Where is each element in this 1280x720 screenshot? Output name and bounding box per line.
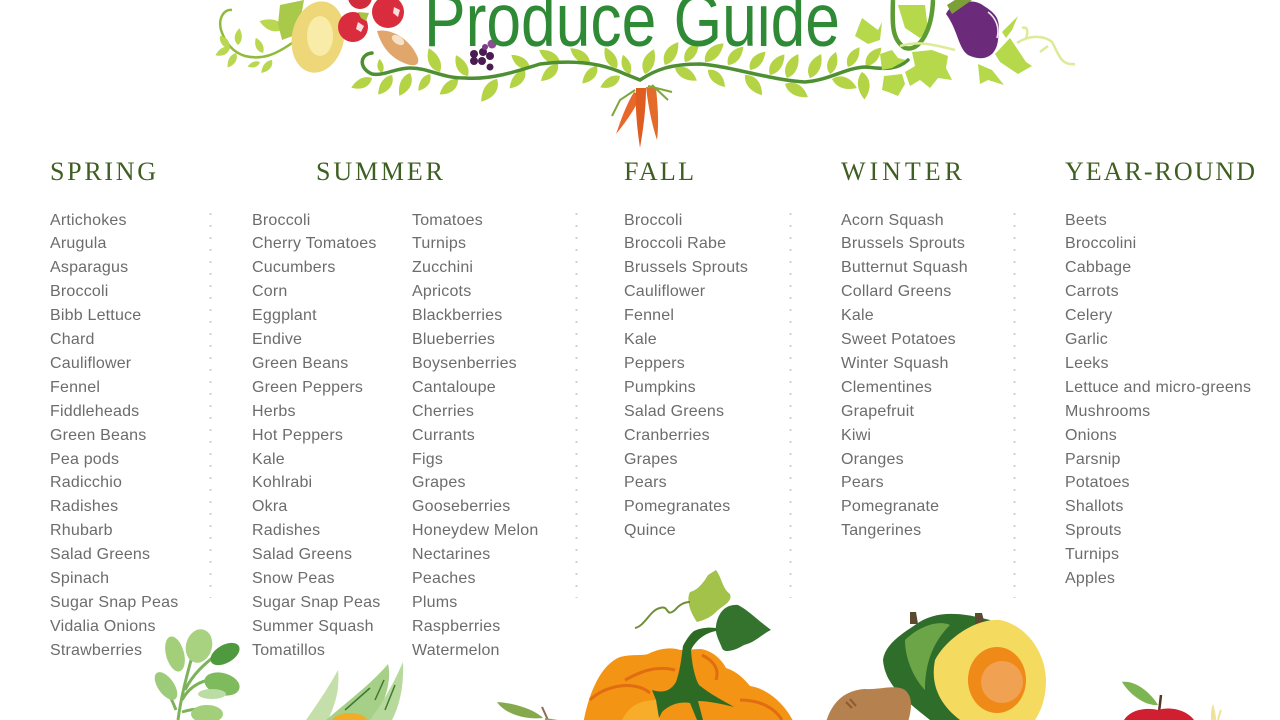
list: summer produce, second column: Raspberries [412,618,500,635]
illustration: header vine garland with produce [216,0,1076,148]
list: summer produce, second column: Currants [412,427,475,444]
list: fall produce: Grapes [624,451,678,468]
list: year-round produce: Potatoes [1065,474,1130,491]
lemon [285,0,351,78]
list: spring produce: Chard [50,331,95,348]
pumpkin [583,570,795,720]
list: summer produce, first column: Herbs [252,403,296,420]
strawberries [338,0,404,42]
list: summer produce, second column: Cantaloupe [412,379,496,396]
list: winter produce: Winter Squash [841,355,949,372]
right lime grape leaves [855,5,1032,96]
panel: winter [841,157,968,539]
list: winter produce: Sweet Potatoes [841,331,956,348]
list: winter produce: Butternut Squash [841,259,968,276]
apple [1122,682,1221,720]
list: year-round produce: Lettuce and micro-greens [1065,379,1251,396]
list: summer produce, first column: Broccoli [252,212,311,228]
list: summer produce, second column: Gooseberries [412,498,510,515]
U-shaped stems [893,0,933,48]
list: year-round produce: Apples [1065,570,1115,587]
list: summer produce, second column: Plums [412,594,457,611]
heading: summer: SUMMER [316,157,444,186]
list: summer produce, first column: Sugar Snap Peas [252,594,380,611]
panel: fall [624,157,748,539]
sweet potato [826,687,911,720]
list: summer produce, first column: Kohlrabi [252,474,312,491]
panel: spring [50,157,178,659]
list: year-round produce: Parsnip [1065,451,1121,468]
corn [306,662,403,720]
list: winter produce: Acorn Squash [841,212,944,228]
list: summer produce, second column: Blackberries [412,307,502,324]
list: summer produce, second column: Blueberries [412,331,495,348]
list: summer produce, first column: Okra [252,498,287,515]
list: summer produce, first column: Cherry Tomatoes [252,235,377,252]
list: fall produce: Pomegranates [624,498,730,515]
list: summer produce, second column: Cherries [412,403,474,420]
list: year-round produce: Turnips [1065,546,1119,563]
list: year-round produce: Leeks [1065,355,1109,372]
eggplant [946,0,999,58]
list: winter produce: Pears [841,474,884,491]
list: year-round produce: Beets [1065,212,1107,228]
list: summer produce, second column: Honeydew Melon [412,522,538,539]
list: fall produce: Quince [624,522,676,539]
heading: year-round: YEAR-ROUND [1065,157,1255,186]
list: winter produce [841,212,968,539]
tan fig [377,30,418,65]
list: year-round produce: Celery [1065,307,1112,324]
list: summer produce, second column: Figs [412,451,443,468]
list: summer produce, first column: Summer Squash [252,618,374,635]
list: summer produce, first column: Endive [252,331,302,348]
list: summer produce, first column: Eggplant [252,307,317,324]
list: winter produce: Clementines [841,379,932,396]
list: summer produce, second column: Tomatoes [412,212,483,228]
list: summer produce, second column: Nectarines [412,546,490,563]
list: summer produce, first column: Hot Peppers [252,427,343,444]
list: spring produce: Rhubarb [50,522,113,539]
list: fall produce [624,212,748,539]
list: fall produce: Kale [624,331,657,348]
list: year-round produce: Carrots [1065,283,1119,300]
list: summer produce, first column: Tomatillos [252,642,325,659]
list: fall produce: Fennel [624,307,674,324]
panel: summer [252,157,538,659]
list: winter produce: Oranges [841,451,904,468]
list: summer produce, second column: Apricots [412,283,471,300]
list: spring produce: Asparagus [50,259,128,276]
heading: winter: WINTER [841,157,963,186]
list: spring produce [50,212,178,659]
list: spring produce: Green Beans [50,427,146,444]
list: winter produce: Kiwi [841,427,871,444]
main vine leaves [350,39,885,105]
list: year-round produce: Shallots [1065,498,1124,515]
list: winter produce: Pomegranate [841,498,939,515]
list: fall produce: Broccoli Rabe [624,235,726,252]
list: spring produce: Spinach [50,570,109,587]
list: year-round produce: Cabbage [1065,259,1131,276]
list: spring produce: Strawberries [50,642,142,659]
list: summer produce, second column [412,212,538,659]
list: year-round produce: Sprouts [1065,522,1122,539]
fern greens [150,626,243,720]
left tendril vine [214,0,304,75]
list: spring produce: Radishes [50,498,118,515]
list: spring produce: Broccoli [50,283,109,300]
list: spring produce: Cauliflower [50,355,131,372]
list: summer produce, second column: Turnips [412,235,466,252]
list: spring produce: Radicchio [50,474,122,491]
main green vine [362,53,908,82]
list: fall produce: Brussels Sprouts [624,259,748,276]
list: summer produce, first column: Radishes [252,522,320,539]
list: winter produce: Collard Greens [841,283,951,300]
list: fall produce: Broccoli [624,212,683,228]
list: year-round produce: Garlic [1065,331,1108,348]
list: fall produce: Cauliflower [624,283,705,300]
list: spring produce: Artichokes [50,212,127,228]
list: summer produce, first column: Salad Greens [252,546,352,563]
list: summer produce, first column: Corn [252,283,287,300]
list: winter produce: Kale [841,307,874,324]
list: fall produce: Salad Greens [624,403,724,420]
list: summer produce, first column: Green Peppers [252,379,363,396]
list: fall produce: Cranberries [624,427,710,444]
list: spring produce: Vidalia Onions [50,618,156,635]
heading: spring: SPRING [50,157,156,186]
list: fall produce: Pumpkins [624,379,696,396]
list: summer produce, first column: Cucumbers [252,259,336,276]
panel: year-round [1065,157,1255,587]
list: winter produce: Brussels Sprouts [841,235,965,252]
carrots [612,85,672,148]
list: summer produce, second column: Boysenberries [412,355,517,372]
list: summer produce, first column: Green Beans [252,355,348,372]
list: year-round produce [1065,212,1251,587]
list: spring produce: Salad Greens [50,546,150,563]
purple berries [470,40,496,70]
heading: fall: FALL [624,157,694,186]
list: year-round produce: Broccolini [1065,235,1136,252]
list: spring produce: Sugar Snap Peas [50,594,178,611]
list: winter produce: Tangerines [841,522,921,539]
list: year-round produce: Mushrooms [1065,403,1150,420]
list: fall produce: Pears [624,474,667,491]
list: summer produce, second column: Watermelon [412,642,500,659]
list: winter produce: Grapefruit [841,403,914,420]
list: spring produce: Fennel [50,379,100,396]
list: spring produce: Bibb Lettuce [50,307,141,324]
list: summer produce, first column [252,212,380,659]
list: summer produce, second column: Grapes [412,474,466,491]
list: spring produce: Arugula [50,235,107,252]
list: spring produce: Fiddleheads [50,403,139,420]
list: year-round produce: Onions [1065,427,1117,444]
list: summer produce, first column: Kale [252,451,285,468]
list: summer produce, first column: Snow Peas [252,570,335,587]
small leaf with twig [497,702,558,720]
list: summer produce, second column: Peaches [412,570,476,587]
list: summer produce, second column: Zucchini [412,259,473,276]
list: spring produce: Pea pods [50,451,119,468]
pale right tendril [900,28,1075,64]
list: fall produce: Peppers [624,355,685,372]
acorn squash [883,612,1046,720]
